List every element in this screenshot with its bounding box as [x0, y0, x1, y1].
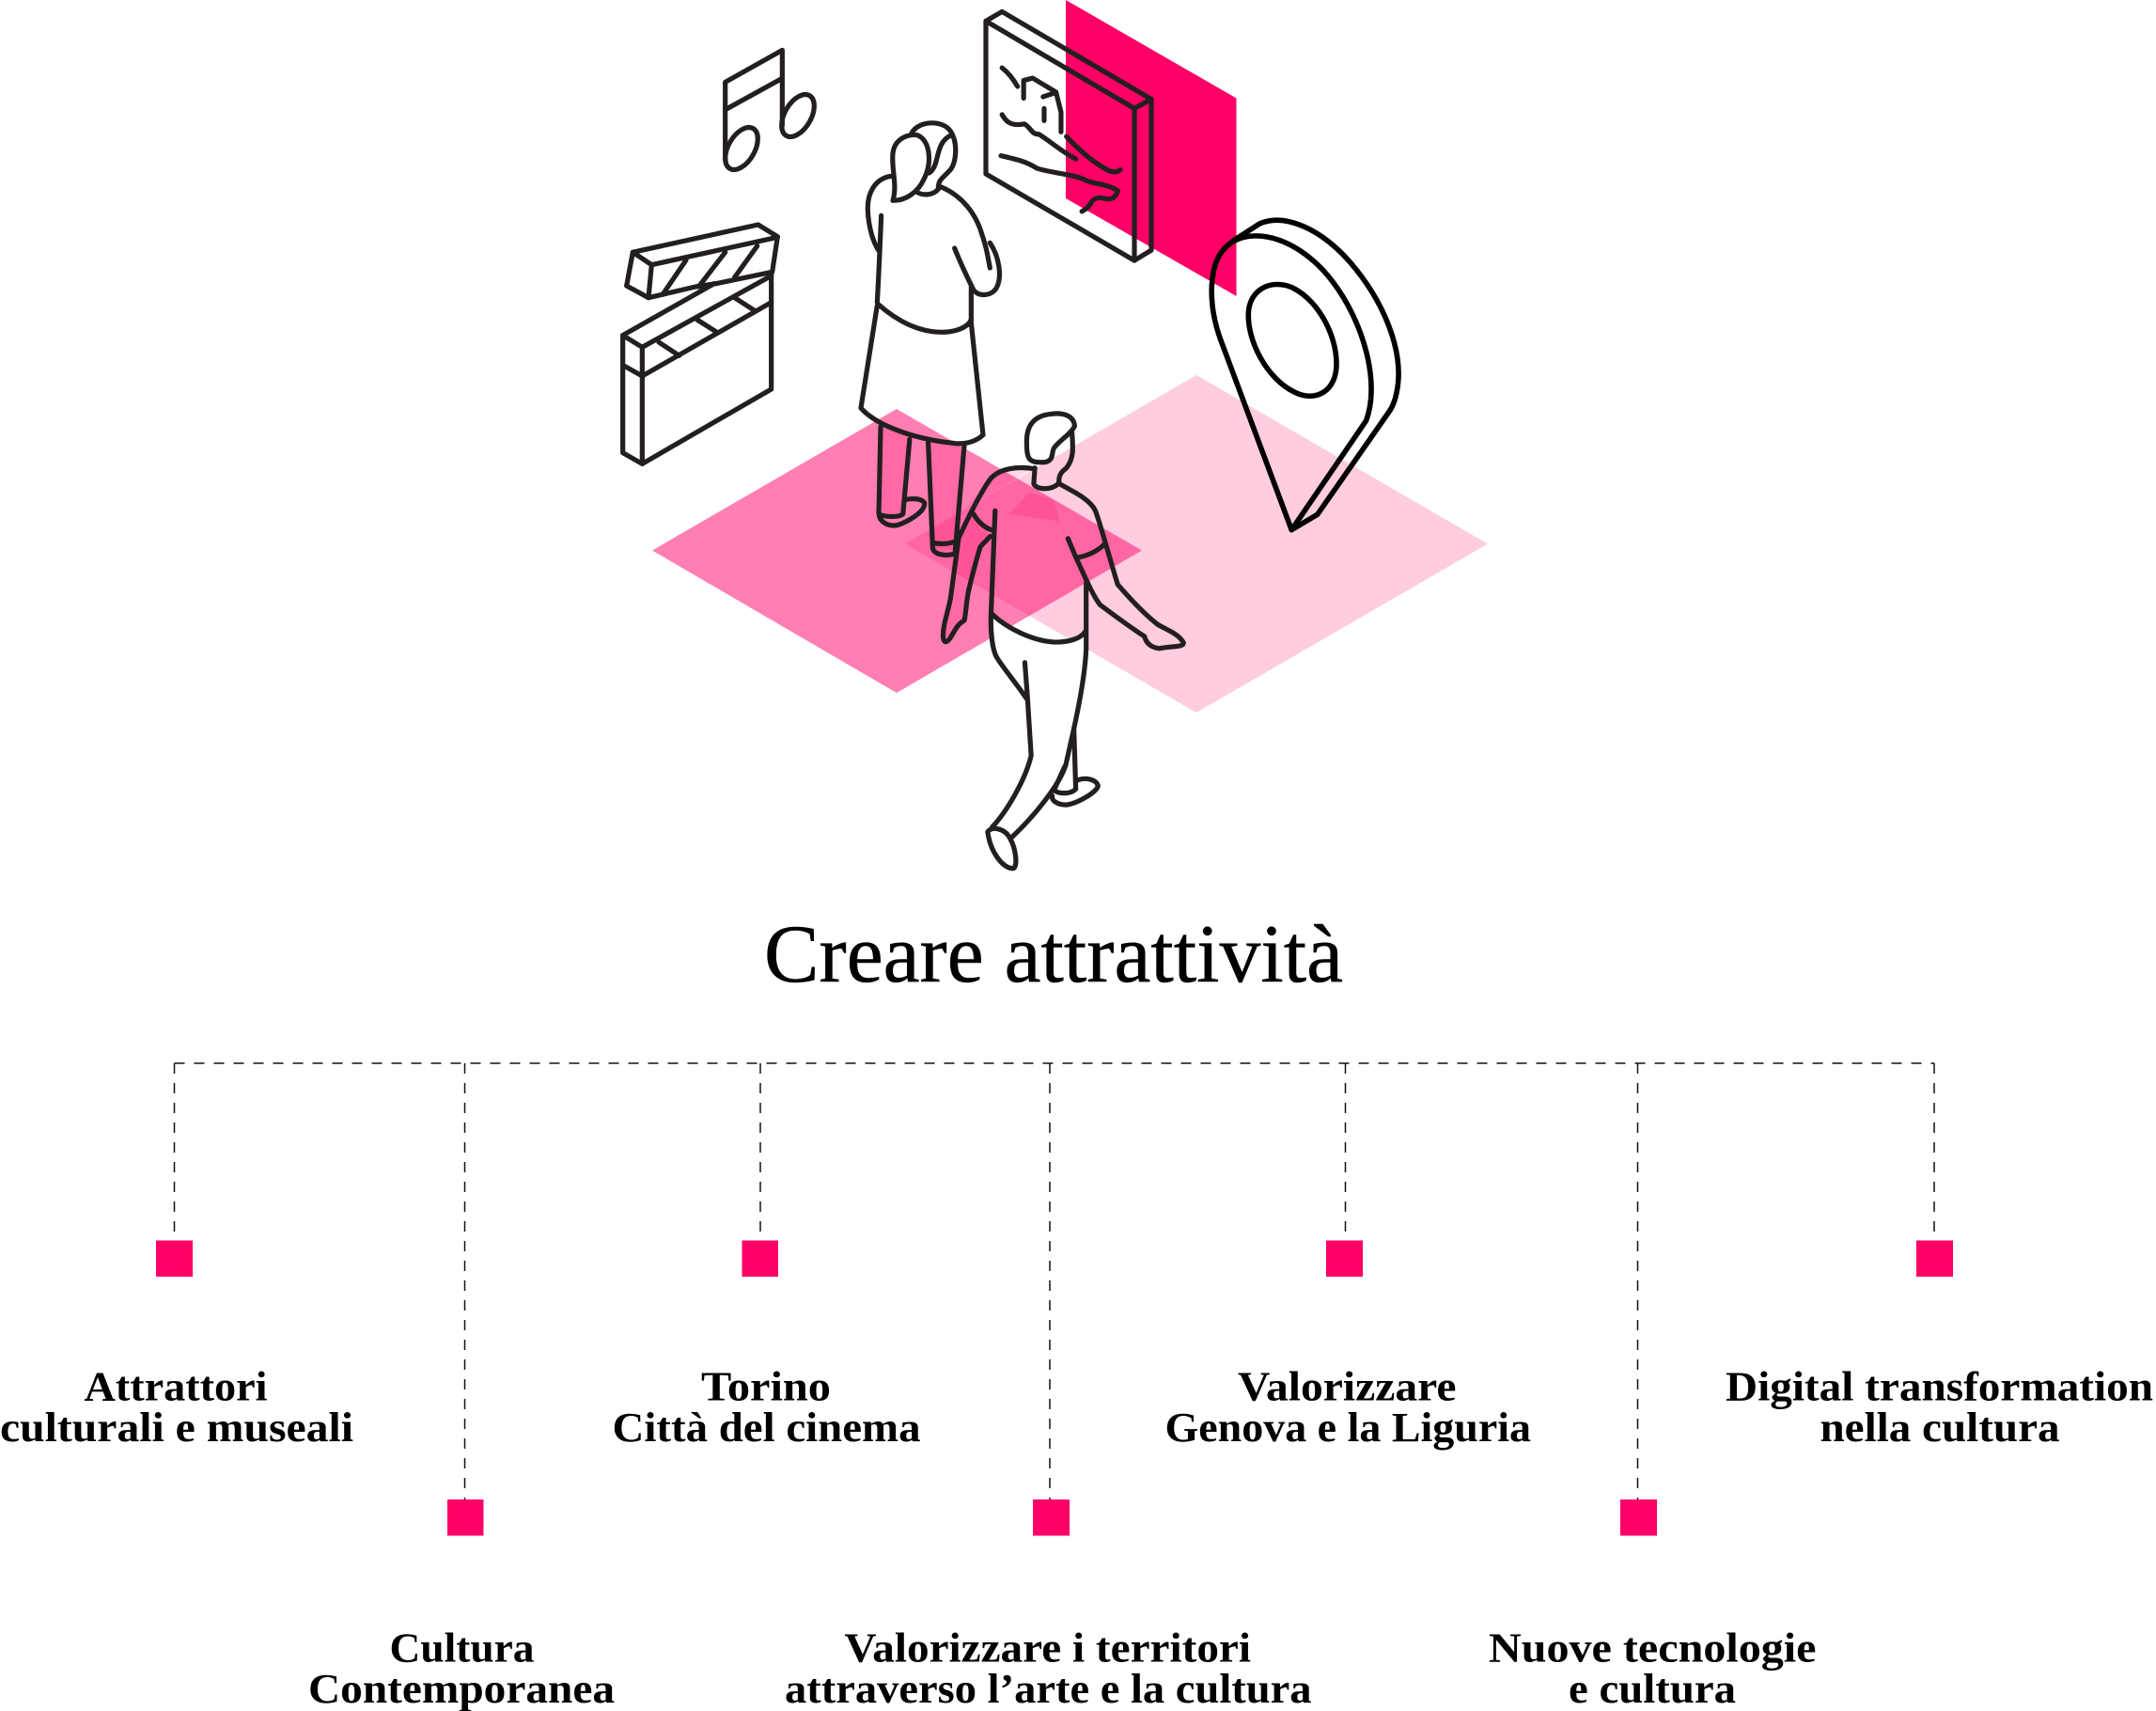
marker: Cultura Contemporanea [447, 1499, 483, 1536]
label: Cultura Contemporanea: Contemporanea [308, 1666, 615, 1711]
icon: film clapperboard [623, 225, 777, 463]
label: Digital transformation nella cultura [1726, 1363, 2153, 1451]
icon: location pin [1211, 220, 1398, 530]
marker: Attrattori culturali e museali [156, 1241, 193, 1277]
label: Valorizzare Genova e la Liguria [1165, 1363, 1531, 1451]
label: Attrattori culturali e museali: Attrattori [85, 1363, 267, 1410]
man hair [1026, 414, 1074, 463]
man shirt shade [943, 467, 1033, 643]
label: Cultura Contemporanea: Cultura [389, 1625, 534, 1672]
woman body and dress [861, 123, 999, 444]
man trousers fill [992, 614, 1086, 839]
icon: framed painting [986, 11, 1151, 260]
label: Attrattori culturali e museali [0, 1363, 353, 1451]
title: Creare attrattività [764, 909, 1343, 1000]
icon: music note [719, 50, 820, 175]
dashed connector tree [175, 1063, 1934, 1499]
marker: Torino Città del cinema [742, 1241, 778, 1277]
man head, neck and torso [943, 433, 1183, 699]
marker: Nuove tecnologie e cultura [1620, 1499, 1657, 1536]
label: Valorizzare Genova e la Liguria: Valorizzare [1238, 1363, 1457, 1410]
marker: Valorizzare i territori [1033, 1499, 1070, 1536]
label: Nuove tecnologie e cultura: e cultura [1569, 1666, 1736, 1711]
marker: Digital transformation nella cultura [1916, 1241, 1953, 1277]
figure: walking man [943, 414, 1183, 869]
label: Digital transformation nella cultura: nella cultura [1820, 1405, 2060, 1451]
label: Torino Città del cinema: Torino [701, 1363, 831, 1410]
marker: Valorizzare Genova e la Liguria [1326, 1241, 1363, 1277]
shirt shadow triangle [1009, 493, 1060, 521]
label: Torino Città del cinema: Città del cinema [613, 1405, 921, 1451]
label: Nuove tecnologie e cultura: Nuove tecnologie [1489, 1625, 1816, 1672]
man legs and shoes [988, 582, 1098, 869]
pink wall panel [1066, 0, 1237, 296]
woman legs [879, 423, 964, 555]
label: Valorizzare i territori attraverso l’arte e la cultura: Valorizzare i territori [844, 1625, 1251, 1672]
label: Torino Città del cinema [613, 1363, 921, 1451]
label: Valorizzare Genova e la Liguria: Genova e la Liguria [1165, 1405, 1531, 1451]
label: Valorizzare i territori attraverso l’arte e la cultura: attraverso l’arte e la cultura [785, 1666, 1312, 1711]
dark pink floor tile [652, 409, 1142, 693]
light pink floor tile [905, 375, 1488, 713]
label: Attrattori culturali e museali: culturali e museali [0, 1405, 353, 1451]
label: Digital transformation nella cultura: Digital transformation [1726, 1363, 2153, 1410]
figure: woman viewing the painting [861, 123, 999, 555]
label: Valorizzare i territori attraverso l’arte e la cultura [785, 1625, 1312, 1711]
illustration: isometric culture scene [623, 0, 1488, 869]
label: Cultura Contemporanea [308, 1625, 615, 1711]
label: Nuove tecnologie e cultura [1489, 1625, 1816, 1711]
